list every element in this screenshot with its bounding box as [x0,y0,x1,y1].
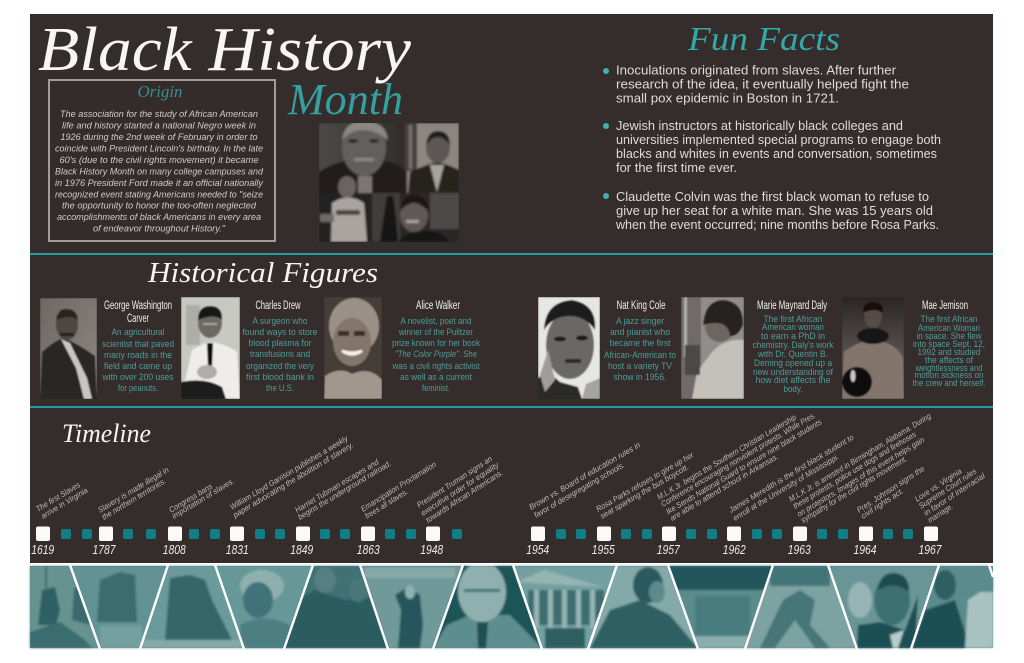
timeline: years: 1955 [592,543,615,557]
text: Jemison bio: 1992 and studied [918,347,980,357]
fact 3: give up her seat for a white man. She was 15 years old [616,204,933,218]
background panel [30,14,993,563]
fact 2: for the first time ever. [616,161,737,175]
event: 1948: President Truman signs an [415,454,494,510]
text: Jemison bio: American Woman [918,323,980,333]
event: 1954: Brown vs. Board of education rules in [528,440,642,512]
event: 1963: on protestors. Images of this event helps gain [795,435,926,519]
photo strip: teal history images [30,562,993,649]
event: 1849: Harriet Tubman escapes and [293,457,381,515]
event: 1619: arrive in Virginia [39,485,90,521]
timeline: years: 1787 [92,543,116,557]
list: fun facts [603,64,941,232]
fact 1: Inoculations originated from slaves. After further [616,64,896,78]
photo: Marie Maynard Daly [681,297,744,399]
icon: bullet 3 [603,193,609,199]
text: Daly bio: Marie Maynard Daly [757,300,827,312]
text: Walker bio: was a civil rights activist [392,361,480,371]
fact 1: research of the idea, it eventually helped fight the [616,78,909,92]
timeline: years: 1954 [526,543,549,557]
event: 1967: Love vs. Virginia [913,466,964,504]
fact 3: Claudette Colvin was the first black woman to refuse to [616,190,929,204]
text: Walker bio: winner of the Pulitzer [398,327,473,337]
text block: origin paragraph: coincide with President Lincoln's birthday. In the late [55,143,263,154]
text: Cole bio [604,300,676,382]
text: Daly bio: new understanding of [753,367,833,377]
event: 1863: frees all slaves. [363,487,410,521]
timeline: years: 1808 [163,543,186,557]
text: Cole bio: African-American to [604,350,676,360]
text: Daly bio: Deming opened up a [754,358,832,368]
title: Black History: Black History [38,16,412,84]
text: Carver bio: many roads in the [104,350,172,360]
icon: bullet 2 [603,123,609,129]
heading: fun facts: Fun Facts [687,21,840,58]
timeline: years: 1967 [918,543,942,557]
event: 1957: are able to attend school in Arkansas. [668,452,780,523]
text: Carver bio: George Washington [104,300,172,312]
text: Drew bio [242,300,318,393]
photo: Mae Jemison [842,297,904,399]
event: 1967 [913,466,987,525]
text block: origin paragraph [55,109,264,234]
fact 3: when the event occurred; nine months before Rosa Parks. [615,218,939,232]
text: Daly bio: American woman [762,322,824,332]
text: Walker bio: "The Color Purple". She [395,349,477,359]
event: 1964: civil rights act. [859,486,905,521]
text block: origin paragraph: in 1976 President Ford made it an official nationally [55,178,264,189]
event: 1955: Rosa Parks refuses to give up her [594,450,695,514]
text: Cole bio: show in 1956. [614,372,666,382]
event: 1963: these protests, police use dogs and firehoses [791,430,918,511]
timeline: years: 1863 [357,543,380,557]
event: 1831: William Lloyd Garrison publishes a weekly [228,433,350,512]
text: Jemison bio: the affects of [925,355,973,365]
text: Jemison bio: motion sickness on [914,370,984,380]
text: Daly bio [752,300,834,394]
heading: origin: Origin [138,82,182,101]
text: Jemison bio [912,300,986,388]
text: Jemison bio: into space Sept. 12, [913,339,985,349]
heading: historical figures: Historical Figures [147,257,378,289]
text: Drew bio: first blood bank in [246,372,314,382]
timeline: years: 1619 [31,543,54,557]
text: Carver bio: field and came up [104,361,172,371]
event: 1787: Slavery is made illegal in [96,465,171,515]
text: Walker bio [392,300,480,393]
text block: origin paragraph: life and history started a national Negro week in [62,120,256,132]
event: 1967: Supreme Court rules [917,467,978,511]
event: 1808: Congress bans [167,482,214,515]
text: Drew bio: A surgeon who [252,316,308,326]
timeline: markers [36,526,938,541]
text: Cole bio: host a variety TV [608,361,672,371]
event: 1963: M.L.K Jr. is arrested in Birmingham, Alabama. During [787,411,933,504]
event: 1967: in favor of interracial [922,471,987,518]
text: Carver bio [102,300,174,393]
fact 1: small pox epidemic in Boston in 1721. [616,92,839,106]
text: Drew bio: the U.S. [266,383,294,393]
fact 2: Jewish instructors at historically black colleges and [616,119,903,133]
text block: origin paragraph: the opportunity to honor the too-often neglected [62,201,257,212]
text: Daly bio: to earn a PhD in [761,331,825,341]
text: Jemison bio: Mae Jemison [922,300,968,312]
text block: origin paragraph: 1926 during the 2nd week of February in order to [60,132,258,143]
text: Daly bio: body. [784,384,802,394]
event: 1948: towards African Americans. [424,468,505,525]
event: 1619: The first Slaves [34,480,82,514]
timeline: years: 1948 [420,543,443,557]
timeline: years: 1957 [657,543,681,557]
decorative white diagonal dividers [70,565,993,649]
event: 1962: enroll at the University of Mississippi. [731,452,841,523]
text: Carver bio: An agricultural [112,327,164,337]
fact 2: blacks and whites in events and conversation, sometimes [616,147,937,161]
text: Daly bio: with Dr. Quentin B. [757,349,828,359]
timeline: years [31,543,942,557]
text: Daly bio: The first African [764,314,822,324]
text: Cole bio: A jazz singer [616,316,664,326]
timeline: years: 1831 [226,543,249,557]
text: Carver bio: scientist that paved [102,339,174,349]
text: Carver bio: for peanuts. [118,383,158,393]
event: 1957: M.L.K Jr. begins the Southern Christian Leadership [655,413,798,502]
event: 1967: marriage. [926,502,955,525]
text: Cole bio: became the first [610,338,671,348]
text: Walker bio: as well as a current [400,372,472,382]
fact 1 [616,64,909,106]
text block: origin paragraph: accomplishments of black Americans in every area [57,212,261,223]
timeline: years: 1849 [290,543,313,557]
text: Daly bio: chemistry. Daly's work [752,340,834,350]
text: Jemison bio: the crew and herself. [912,378,986,388]
divider: teal line under header [30,253,993,255]
divider: teal line above timeline [30,406,993,408]
text block: origin paragraph: 60's (due to the civil rights movement) it became [60,155,258,166]
event: 1831: paper advocating the abolition of slavery. [231,440,355,520]
text: Drew bio: Charles Drew [256,300,301,312]
text block: origin paragraph: Black History Month on many college campuses and [55,166,264,177]
text block: origin paragraph: recognized event stating Americans needed to "seize [55,189,263,200]
icon: bullet 1 [603,68,609,74]
timeline: years: 1964 [854,543,877,557]
text: Carver bio: Carver [127,313,149,325]
event: 1957: Ike Sends National Guard to ensure nine black students [664,418,823,516]
event: 1963: sympathy for the civil rights movement. [799,454,909,525]
text: Jemison bio: The first African [920,314,978,324]
text: Cole bio: Nat King Cole [616,300,666,312]
photo: Alice Walker [324,297,382,399]
text: Jemison bio: in space. She flew [916,331,982,341]
text: Walker bio: Alice Walker [416,300,460,312]
text: Drew bio: transfusions and [250,349,310,359]
heading: timeline: Timeline [62,419,151,448]
event: 1962: James Meredith is the first black student to [727,433,856,515]
event: 1808: importation of slaves. [170,476,236,521]
text: Walker bio: feminist. [422,383,450,393]
text: Drew bio: organized the very [246,361,314,371]
text: Jemison bio: weightlessness and [915,363,982,373]
subtitle: Month: Month [287,75,403,124]
text block: origin paragraph: The association for the study of African American [60,109,258,120]
event: 1948: executive order for equality [419,460,501,518]
photo: George Washington Carver [40,298,97,399]
event: 1849: begins the underground railroad. [296,459,393,522]
text: Drew bio: found ways to store [242,327,318,337]
timeline: years: 1963 [788,543,811,557]
text: Daly bio: how diet affects the [756,375,830,385]
timeline: years: 1962 [723,543,746,557]
photo: Nat King Cole [538,297,600,399]
fact 2: universities implemented special programs to engage both [616,133,941,147]
event: 1964: Pres. Johnson signs the [855,464,927,515]
text: Walker bio: prize known for her book [392,338,480,348]
text: Walker bio: A novelist, poet and [400,316,472,326]
fact 2 [616,119,941,175]
text block: origin paragraph: of endeavor throughout History." [93,223,226,234]
photo collage: leaders [319,118,459,242]
fact 3 [615,190,939,232]
photo: Charles Drew [181,297,240,399]
event: 1957: Conference encouraging nonviolent protests. While Pres. [659,411,817,509]
text: Cole bio: and pianist who [610,327,670,337]
text: Drew bio: blood plasma for [248,338,312,348]
event: 1954: favor of desegregating schools. [532,460,626,520]
event: 1787: the northern territories. [100,476,168,522]
text: Carver bio: with over 200 uses [102,372,174,382]
event: 1863: Emancipation Proclamation [359,460,438,514]
panel: origin [49,80,275,241]
event: 1955: seat sparking the bus boycott. [598,462,690,521]
